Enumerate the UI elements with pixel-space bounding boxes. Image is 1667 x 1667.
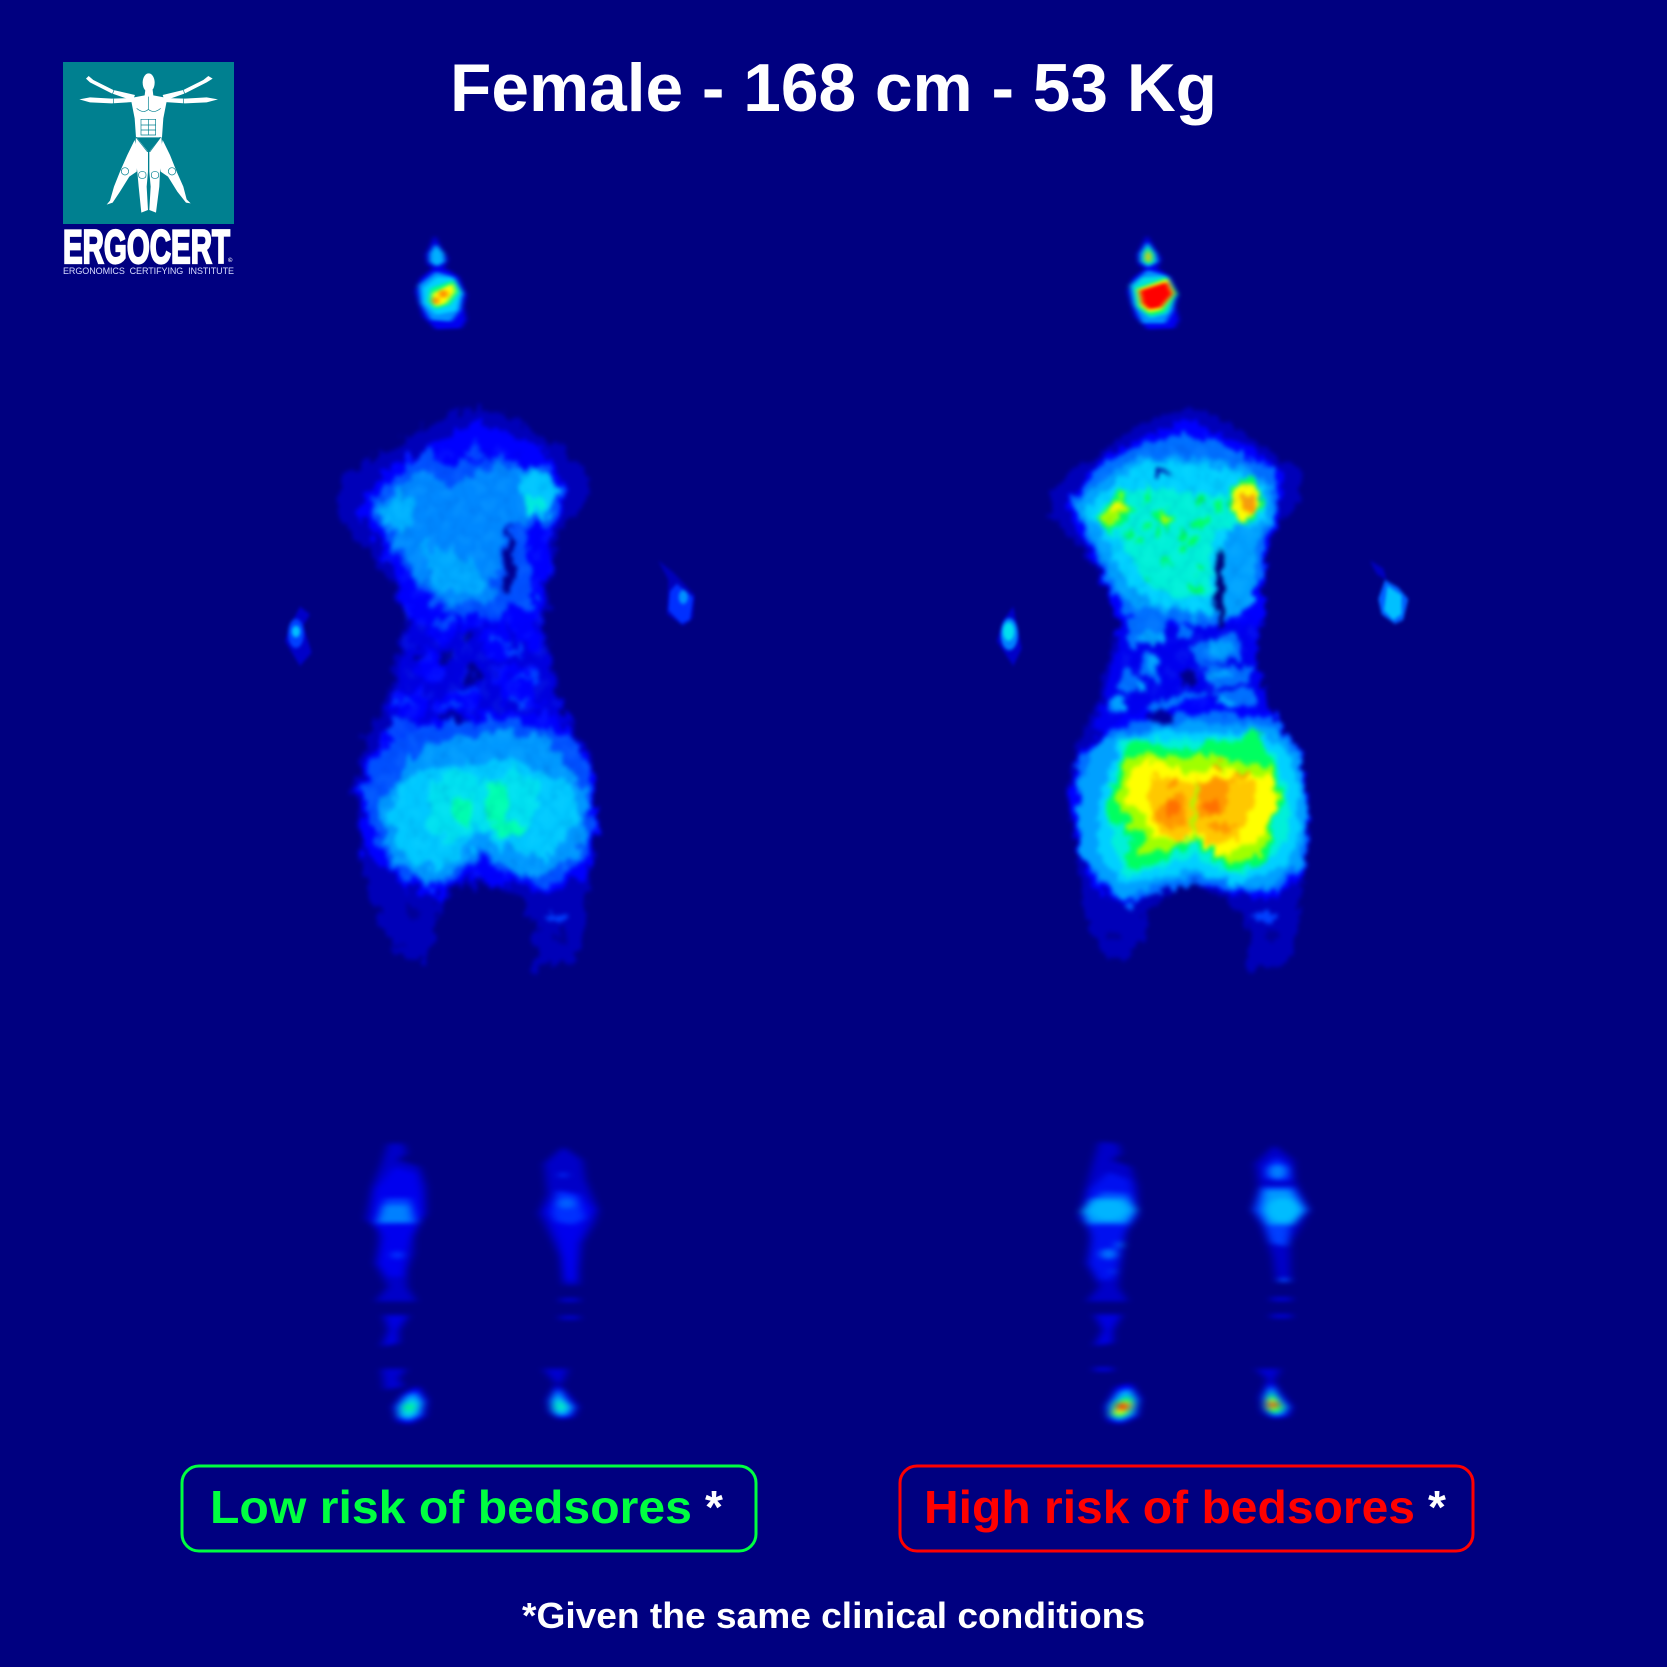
diamond mesh texture xyxy=(357,446,595,894)
shoulder hot spot xyxy=(1230,478,1262,522)
heat map: right arm spots xyxy=(997,561,1408,666)
left leg A xyxy=(366,1143,426,1302)
high risk label: High risk of bedsores xyxy=(924,1481,1415,1533)
heat map: left torso and pelvis, low risk xyxy=(337,408,597,970)
back gap xyxy=(503,526,515,595)
right heel A xyxy=(1105,1383,1140,1424)
heat map: right legs and heels, high risk xyxy=(1079,1142,1309,1424)
upper blue body xyxy=(1063,419,1283,626)
logo tagline: ERGONOMICS CERTIFYING INSTITUTE xyxy=(63,266,234,276)
light blue xyxy=(373,465,557,603)
left leg B xyxy=(539,1147,598,1285)
heat map: left arm spots xyxy=(285,561,695,666)
amber xyxy=(1147,775,1257,846)
asterisk: * xyxy=(705,1481,723,1533)
lower blue body xyxy=(1070,699,1310,905)
callout: low risk xyxy=(182,1466,756,1551)
right leg B xyxy=(1252,1145,1309,1283)
lower blue body xyxy=(360,710,597,898)
right heel B xyxy=(1261,1377,1292,1419)
chest hot spots xyxy=(1097,492,1137,529)
cyan xyxy=(377,492,420,530)
light blue xyxy=(1075,457,1273,618)
copyright mark: © xyxy=(228,257,233,264)
green xyxy=(1107,729,1283,871)
left heel A xyxy=(394,1386,427,1424)
outer contour xyxy=(337,408,597,970)
asterisk: * xyxy=(1428,1481,1446,1533)
peak pressure xyxy=(454,796,474,822)
waist patches xyxy=(1107,614,1257,714)
logo wordmark: ERGOCERT xyxy=(63,220,230,273)
left heel B xyxy=(548,1383,577,1419)
heat map: left legs and heels, low risk xyxy=(366,1143,598,1424)
upper blue body xyxy=(357,423,567,626)
callout: high risk xyxy=(900,1466,1473,1551)
head map: right high-risk xyxy=(1128,235,1179,329)
calf stripes xyxy=(381,1315,409,1347)
waist patches xyxy=(393,614,540,718)
outer contour xyxy=(1050,408,1310,970)
diamond mesh texture xyxy=(1070,438,1273,706)
orange xyxy=(1157,790,1188,831)
calf stripes xyxy=(1094,1314,1122,1346)
low risk label: Low risk of bedsores xyxy=(210,1481,692,1533)
pelvic crease xyxy=(1192,783,1197,842)
logo: Ergocert xyxy=(63,62,234,276)
icon: vitruvian figure xyxy=(79,73,218,213)
heat map: right torso and pelvis, high risk xyxy=(1050,408,1310,970)
logo teal square xyxy=(63,62,234,224)
right leg A xyxy=(1079,1142,1139,1302)
mid blue xyxy=(367,450,563,614)
head map: left low-risk xyxy=(415,235,466,329)
yellow xyxy=(1125,760,1277,857)
title: Female - 168 cm - 53 Kg xyxy=(450,50,1217,126)
yellow-green xyxy=(1117,752,1280,865)
thigh dark gaps xyxy=(392,632,569,949)
footnote: *Given the same clinical conditions xyxy=(522,1595,1145,1636)
cyan xyxy=(1083,461,1267,614)
waist band xyxy=(1093,618,1280,729)
mid blue xyxy=(1070,434,1280,626)
back gap xyxy=(1214,547,1224,630)
leg-side lower contour patches xyxy=(1254,910,1276,924)
waist band xyxy=(387,618,570,725)
